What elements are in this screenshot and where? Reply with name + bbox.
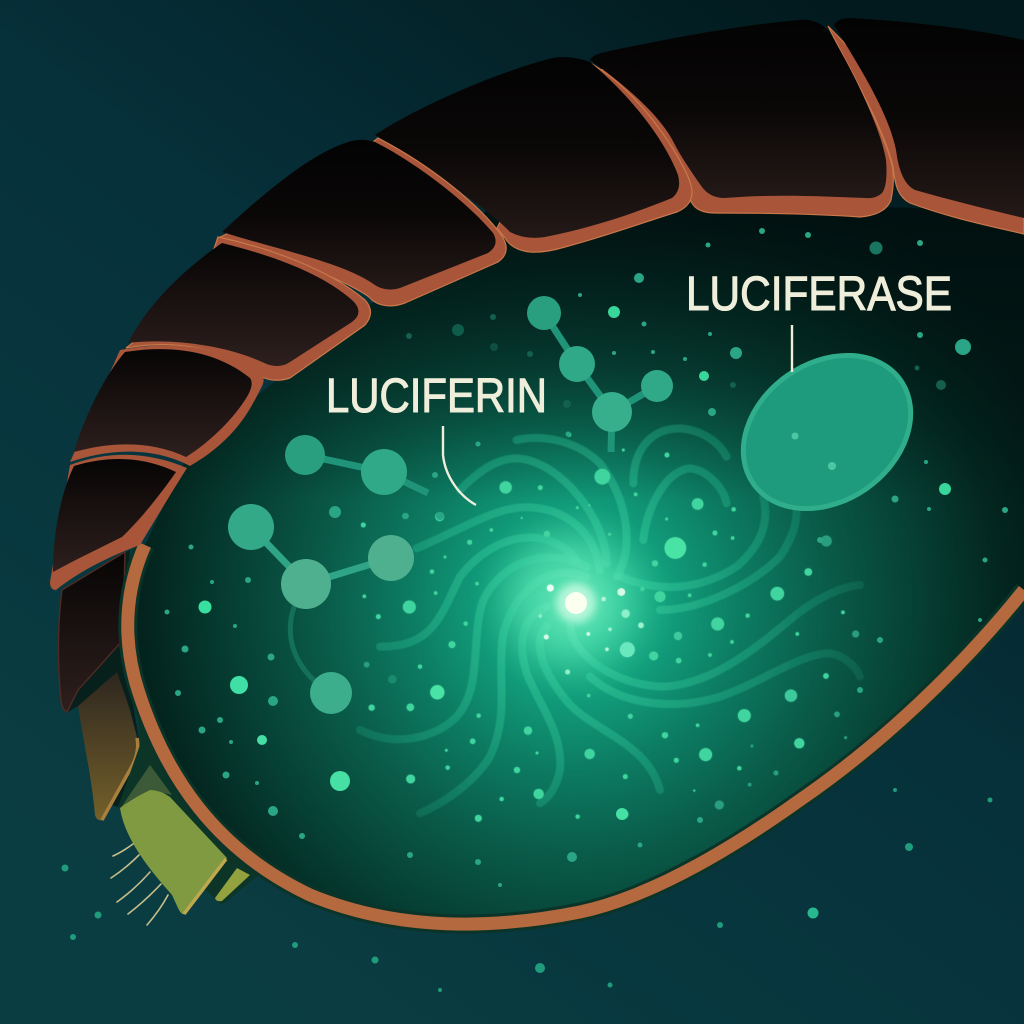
background particles — [62, 788, 992, 992]
luciferin molecule: upper chain — [527, 296, 673, 452]
tail shadow backing — [62, 550, 140, 808]
enzyme body — [714, 324, 940, 540]
plate: green tail segment — [120, 790, 227, 914]
luciferase enzyme — [714, 324, 940, 540]
body interior — [128, 200, 1024, 924]
plate 1 — [834, 18, 1024, 218]
plate 1 edge — [828, 26, 1024, 234]
plate 7 edge — [50, 455, 187, 590]
particles in swirl region — [361, 433, 859, 822]
central glow — [510, 540, 630, 660]
plate edge: green segment highlight — [184, 859, 226, 914]
plate 6 — [74, 349, 252, 457]
plate 2 — [590, 20, 886, 198]
swirl of glowing strands — [360, 428, 860, 813]
hairs — [111, 844, 168, 925]
shadow under tail — [118, 680, 262, 905]
carapace plates — [50, 18, 1024, 590]
plate 4 — [222, 140, 496, 290]
plate 7 — [53, 459, 176, 572]
plate 2 edge — [600, 28, 893, 217]
luciferin molecule: left chains — [228, 435, 428, 714]
plate 5 — [128, 243, 358, 366]
inner dark green strip — [122, 765, 172, 806]
leader line: luciferin — [443, 426, 476, 505]
upper interior shading — [145, 200, 1024, 590]
plate edge: tan highlight — [102, 738, 138, 820]
particles: left and upper interior — [164, 228, 1008, 887]
label: luciferin: LUCIFERIN — [326, 370, 547, 423]
plate 5 edge — [126, 237, 370, 380]
central bright point — [556, 583, 596, 623]
plate: brown tail segment — [78, 672, 139, 820]
plate 4 edge — [218, 138, 506, 306]
leader line: luciferase — [791, 325, 793, 372]
tail segments — [58, 550, 262, 925]
label: luciferase: LUCIFERASE — [686, 268, 952, 321]
plate 3 edge — [497, 64, 692, 252]
body rim — [128, 545, 1024, 924]
plate: dark tail segment — [58, 552, 125, 712]
plate: small green segment — [215, 868, 250, 901]
plate 3 — [375, 57, 679, 238]
plate 6 edge — [70, 345, 264, 466]
